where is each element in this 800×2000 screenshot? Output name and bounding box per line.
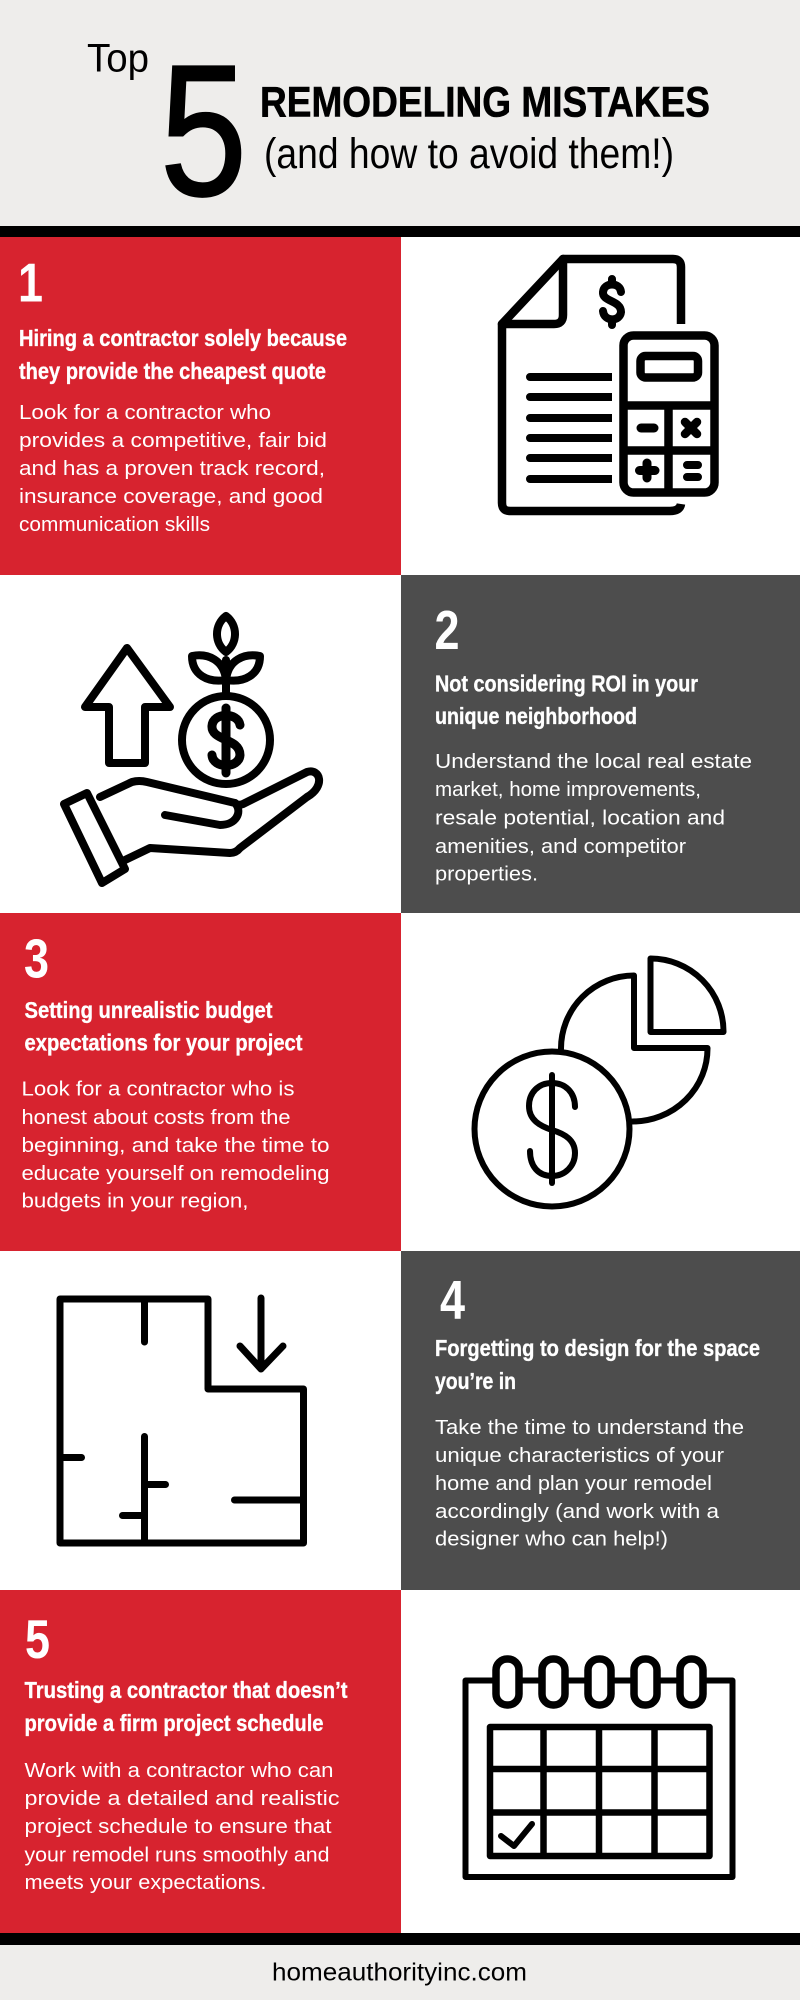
heading 4: Forgetting to design for the space [435,1335,760,1361]
heading 1 line 2: they provide the cheapest quote [19,358,326,384]
body text 2 [435,750,752,886]
number 3: 3 [24,928,49,990]
body text 2: resale potential, location and [435,806,725,830]
body text 2: Understand the local real estate [435,750,752,773]
heading 5 line 2: provide a firm project schedule [24,1710,324,1736]
body text 5: your remodel runs smoothly and [24,1844,330,1866]
panel: mistake 3 [0,913,401,1251]
bottom black band [0,1933,800,1945]
heading 2: Not considering ROI in your [435,670,698,696]
title: Top: Top [87,36,149,80]
number 4: 4 [440,1268,465,1330]
body text 1: Look for a contractor who [19,401,271,424]
body text 3: beginning, and take the time to [22,1134,330,1157]
body text 5: meets your expectations. [24,1871,266,1894]
heading 4 line 2: you’re in [435,1368,516,1394]
body text 4 [435,1416,744,1550]
body text 1: and has a proven track record, [19,457,325,480]
footer [0,1945,800,2000]
heading 3: Setting unrealistic budget [24,997,273,1023]
body text 2: amenities, and competitor [435,835,686,858]
header panel [0,0,800,235]
icon: floor plan with arrow [60,1298,304,1543]
body text 3: Look for a contractor who is [22,1078,294,1100]
body text 5: project schedule to ensure that [24,1815,332,1838]
panel: mistake 1 [0,237,401,575]
body text 2: market, home improvements, [435,778,701,801]
body text 4: home and plan your remodel [435,1472,712,1495]
number 5: 5 [25,1608,50,1670]
body text 4: unique characteristics of your [435,1444,724,1467]
website url: homeauthorityinc.com [272,1958,527,1986]
body text 4: Take the time to understand the [435,1416,744,1439]
body text 5: provide a detailed and realistic [24,1787,340,1810]
top black band [0,226,800,237]
panel: mistake 4 [401,1251,800,1590]
number 2: 2 [434,599,460,661]
icon: coin and pie chart [474,958,724,1206]
body text 3: honest about costs from the [22,1106,290,1129]
icon: calendar with check [466,1659,732,1877]
heading 5: Trusting a contractor that doesn’t [24,1677,348,1703]
body text 1 [19,401,327,536]
body text 1: provides a competitive, fair bid [19,429,327,452]
body text 3: educate yourself on remodeling [22,1162,330,1185]
heading 3 line 2: expectations for your project [24,1030,303,1056]
body text 4: designer who can help!) [435,1528,668,1550]
body text 4: accordingly (and work with a [435,1500,720,1523]
title: remodeling mistakes: REMODELING MISTAKES [260,78,710,126]
panel: mistake 2 [401,575,800,913]
heading 2 line 2: unique neighborhood [435,703,637,729]
body text 1: communication skills [19,513,210,536]
icon: money growth in hand [64,616,319,883]
number 1: 1 [18,252,43,314]
body text 1: insurance coverage, and good [19,485,323,508]
body text 2: properties. [435,862,538,886]
heading 1: Hiring a contractor solely because [19,325,347,351]
subtitle: (and how to avoid them!) [264,130,674,178]
panel: mistake 5 [0,1590,401,1933]
body text 5: Work with a contractor who can [24,1759,334,1782]
title: big number 5: 5 [160,26,247,235]
body text 5 [24,1759,340,1894]
body text 3: budgets in your region, [22,1190,248,1212]
icon: invoice and calculator [502,259,714,511]
body text 3 [22,1078,330,1212]
